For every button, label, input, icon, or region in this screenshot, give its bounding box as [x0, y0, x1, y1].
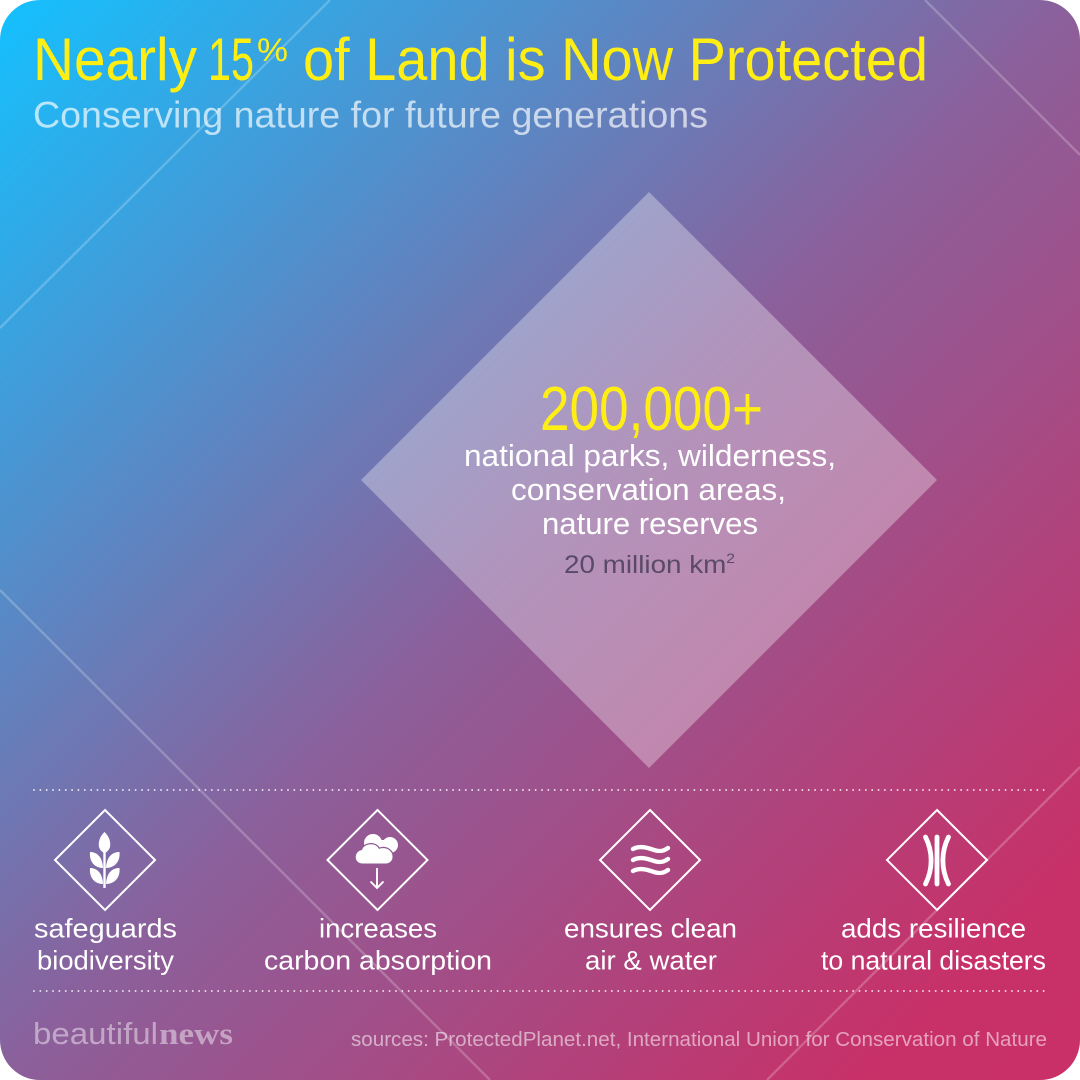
benefit: biodiversity	[34, 810, 177, 976]
label: ensures clean	[564, 914, 737, 944]
area figure: 2	[726, 550, 735, 566]
label: to natural disasters	[821, 946, 1046, 976]
title: 15	[208, 26, 254, 93]
benefit: clean air and water	[564, 810, 737, 976]
label: biodiversity	[37, 946, 174, 976]
title: Nearly	[33, 26, 197, 93]
icon: bending lines	[887, 810, 987, 910]
big number: 200,000+	[540, 375, 763, 444]
icon: waves	[600, 810, 700, 910]
description text: nature reserves	[542, 506, 758, 541]
central diamond panel	[361, 192, 937, 768]
area figure: 20 million km	[564, 551, 710, 579]
title: of Land is Now Protected	[303, 26, 928, 93]
icon: wheat	[55, 810, 155, 910]
label: increases	[319, 914, 437, 944]
icon: cloud with arrow	[328, 810, 428, 910]
label: adds resilience	[841, 914, 1026, 944]
description text: conservation areas,	[511, 472, 786, 507]
title: %	[257, 32, 288, 68]
benefit: resilience	[821, 810, 1046, 976]
label: air & water	[585, 946, 717, 976]
logo: news	[159, 1016, 233, 1051]
benefit: carbon absorption	[264, 810, 492, 976]
label: carbon absorption	[264, 946, 492, 976]
sources: sources: ProtectedPlanet.net, International Union for Conservation of Nature	[351, 1029, 1047, 1051]
logo: beautiful	[33, 1016, 158, 1051]
subtitle: Conserving nature for future generations	[33, 94, 708, 136]
label: safeguards	[34, 914, 177, 944]
diamond shape	[361, 192, 937, 768]
description text: national parks, wilderness,	[464, 438, 836, 473]
